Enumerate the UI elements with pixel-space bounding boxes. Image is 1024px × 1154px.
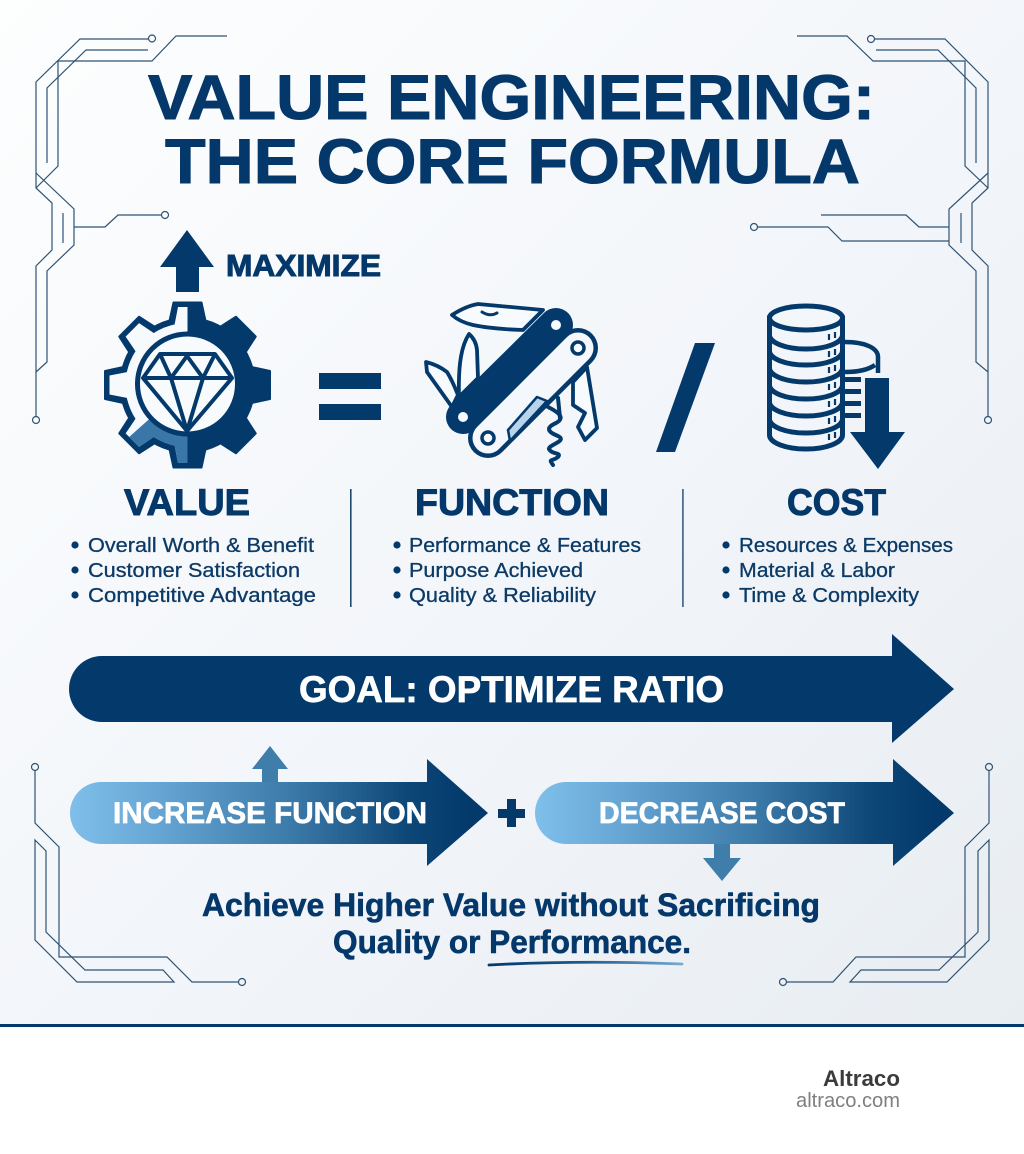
cost bullet list: Material & Labor	[739, 559, 895, 582]
footer brand: Altraco	[823, 1066, 900, 1091]
value bullet list: Competitive Advantage	[88, 584, 316, 607]
circuit decoration: top right	[750, 36, 992, 424]
icon: maximize up arrow	[160, 230, 214, 292]
panel: cost	[722, 481, 953, 607]
closing statement: Achieve Higher Value without Sacrificing	[202, 887, 820, 923]
icon: division slash	[656, 343, 715, 452]
value bullet list: Overall Worth & Benefit	[88, 534, 314, 557]
circuit decoration: bottom left	[32, 764, 246, 986]
icon: coin stack with down arrow	[770, 306, 905, 469]
panel: value	[71, 481, 316, 607]
arrow: goal optimize ratio	[69, 634, 954, 743]
footer brand: altraco.com	[796, 1090, 900, 1112]
circuit decoration: top left	[32, 35, 227, 424]
maximize label: MAXIMIZE	[226, 248, 381, 283]
heading: cost: COST	[787, 481, 886, 523]
function bullet list: Purpose Achieved	[409, 559, 583, 582]
icon: small down arrow	[703, 843, 741, 881]
cost bullet list	[722, 534, 953, 607]
icon: plus sign	[498, 799, 525, 827]
title: VALUE ENGINEERING:	[148, 63, 875, 133]
arrow: decrease cost: DECREASE COST	[599, 797, 845, 830]
value bullet list	[71, 534, 316, 607]
function bullet list: Performance & Features	[409, 534, 641, 557]
icon: gear with diamond	[105, 302, 270, 468]
closing statement: Quality or Performance.	[333, 924, 691, 960]
value bullet list: Customer Satisfaction	[88, 559, 300, 582]
function bullet list	[393, 534, 641, 607]
underline stroke	[489, 962, 682, 965]
title: THE CORE FORMULA	[165, 127, 860, 197]
cost bullet list: Time & Complexity	[739, 584, 920, 607]
icon: multi-tool	[426, 304, 597, 465]
panel: function	[393, 481, 641, 607]
heading: value: VALUE	[124, 481, 250, 523]
icon: equals sign	[319, 373, 381, 420]
footer brand	[796, 1066, 900, 1112]
title	[148, 63, 875, 197]
closing statement	[202, 887, 820, 965]
cost bullet list: Resources & Expenses	[739, 534, 953, 557]
arrow: decrease cost	[535, 759, 954, 866]
footer rule	[0, 1024, 1024, 1027]
arrow: increase function: INCREASE FUNCTION	[113, 797, 427, 830]
arrow: increase function	[70, 759, 488, 866]
arrow: goal optimize ratio: GOAL: OPTIMIZE RATIO	[299, 668, 724, 710]
circuit decoration: bottom right	[780, 764, 992, 986]
function bullet list: Quality & Reliability	[409, 584, 597, 607]
heading: function: FUNCTION	[415, 481, 609, 523]
icon: small up arrow	[252, 746, 288, 783]
